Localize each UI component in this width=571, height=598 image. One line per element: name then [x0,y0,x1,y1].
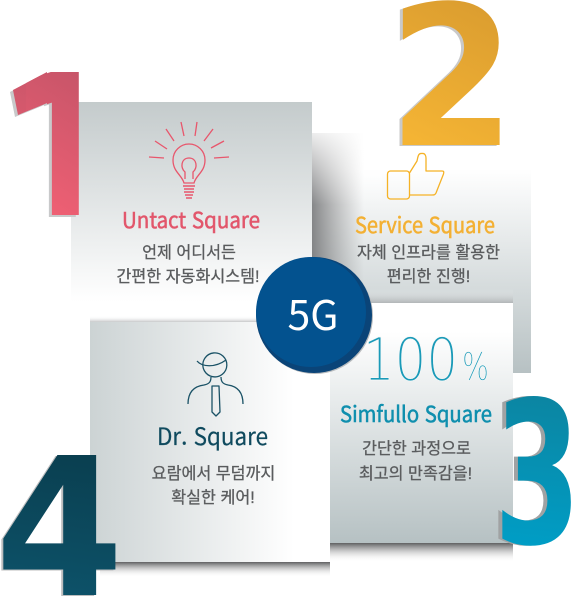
text: simfullo description: 간단한 과정으로 [362,440,471,458]
text: untact description: 언제 어디서든 [142,244,236,262]
badge: 5G circle [256,257,373,374]
icon: light bulb [149,122,229,198]
text: dr description: 요람에서 무덤까지 [152,465,275,483]
icon: doctor with tie [188,353,243,416]
number 1: 1 [9,24,114,306]
number 1 [10,72,79,217]
text: dr description: 확실한 케어! [171,489,255,507]
badge: 5G circle: 5G [287,282,339,342]
number 1: 1 [6,26,111,308]
text: service description: 편리한 진행! [387,268,470,286]
panel: untact square [71,102,312,302]
panel: dr. square [90,316,330,577]
heading: untact square: Untact Square [122,203,260,235]
text: simfullo description: 최고의 만족감을! [359,465,472,483]
panel: service square [312,133,531,373]
heading: simfullo square: Simfullo Square [340,397,492,429]
text: 100 percent: % [462,345,489,389]
text: service description: 자체 인프라를 활용한 [357,244,500,262]
panel: simfullo square [330,303,513,562]
heading: service square: Service Square [355,208,495,240]
text: 100 percent: 100 [363,325,458,394]
text: untact description: 간편한 자동화시스템! [116,268,260,286]
heading: dr. square: Dr. Square [157,417,268,452]
icon: thumbs up [388,153,444,199]
